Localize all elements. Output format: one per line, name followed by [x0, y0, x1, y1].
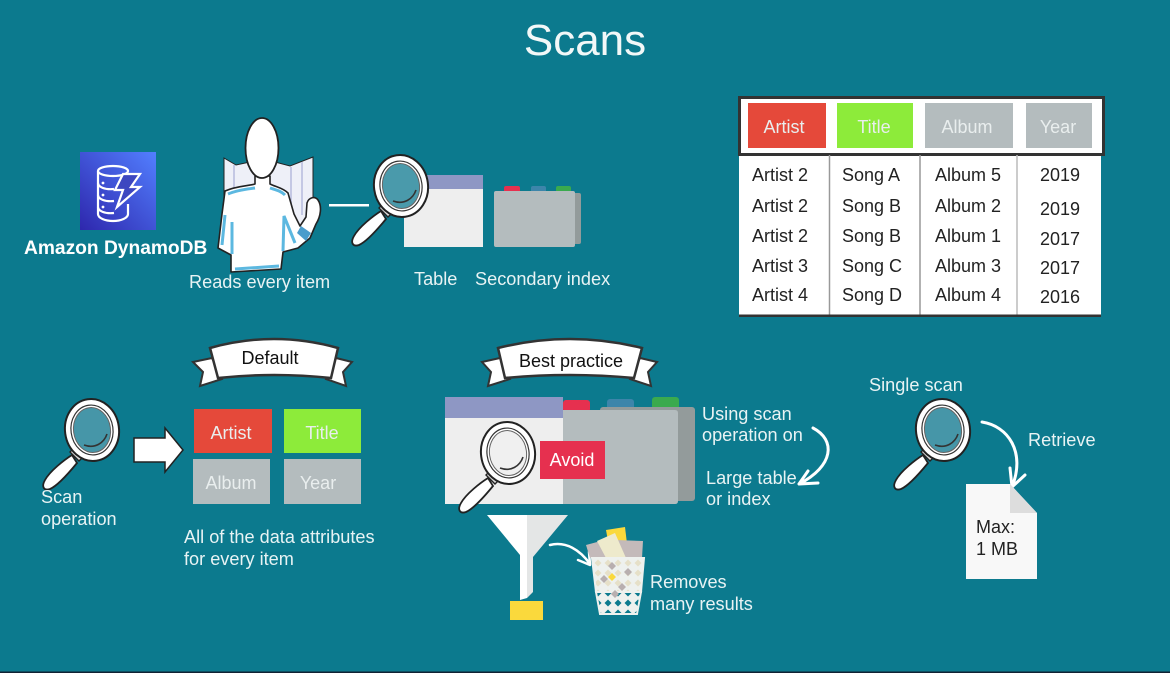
icon: scan magnifier	[43, 396, 123, 490]
ribbon: default	[193, 339, 352, 386]
attribute table: Year	[1040, 117, 1076, 137]
ribbon: best practice	[482, 339, 657, 386]
label: removes many results: Removes	[650, 572, 727, 592]
label: large table or index: or index	[706, 489, 771, 509]
icon: waste bin	[586, 527, 644, 614]
attribute table: Song B	[842, 196, 901, 216]
attribute table: Song B	[842, 226, 901, 246]
index folder with tabs	[563, 397, 695, 504]
attribute table: Title	[857, 117, 891, 137]
title: Scans	[524, 16, 646, 65]
attribute table: Artist 3	[752, 256, 808, 276]
attribute table: 2017	[1040, 229, 1080, 249]
attribute table: Album	[941, 117, 993, 137]
attribute grid: Artist	[210, 423, 252, 443]
attribute table: 2016	[1040, 287, 1080, 307]
label: retrieve: Retrieve	[1028, 430, 1096, 450]
label: large table or index: Large table	[706, 468, 797, 488]
callout: avoid	[540, 441, 605, 479]
icon: magnifier on table	[459, 419, 539, 513]
attribute table: Artist 4	[752, 285, 808, 305]
icon: single scan magnifier	[894, 396, 974, 490]
label: reads every item: Reads every item	[189, 272, 330, 292]
icon: small secondary index	[494, 186, 581, 247]
attribute table: Song C	[842, 256, 902, 276]
label: Amazon DynamoDB: Amazon DynamoDB	[24, 238, 207, 259]
label: table: Table	[414, 269, 457, 289]
attribute table: Artist 2	[752, 226, 808, 246]
ribbon: best practice: Best practice	[519, 351, 623, 371]
label: single scan: Single scan	[869, 375, 963, 395]
attribute table: Album 3	[935, 256, 1001, 276]
attribute grid: Album	[205, 473, 257, 493]
label: secondary index: Secondary index	[475, 269, 610, 289]
label: using scan operation: operation on	[702, 425, 803, 445]
arrow: funnel to bin	[550, 544, 590, 565]
icon: document max 1 MB: 1 MB	[976, 539, 1018, 559]
attribute table: Album 4	[935, 285, 1001, 305]
callout: avoid: Avoid	[550, 450, 594, 470]
arrow: retrieve	[982, 422, 1025, 487]
icon: funnel	[487, 515, 568, 620]
icon: small table	[404, 175, 483, 247]
icon: Amazon DynamoDB	[80, 152, 156, 230]
table panel	[445, 397, 563, 504]
attribute table: Artist 2	[752, 165, 808, 185]
arrow: curved to large table	[799, 428, 828, 484]
icon: person reading a map	[218, 118, 320, 272]
attribute table: Album 5	[935, 165, 1001, 185]
attribute table: 2019	[1040, 165, 1080, 185]
icon: document max 1 MB: Max:	[976, 517, 1015, 537]
attribute table: Song D	[842, 285, 902, 305]
icon: document max 1 MB	[966, 484, 1037, 579]
attribute table: Song A	[842, 165, 900, 185]
attribute table: Artist 2	[752, 196, 808, 216]
attribute table: 2019	[1040, 199, 1080, 219]
attribute table: Album 2	[935, 196, 1001, 216]
arrow: scan to attributes	[134, 428, 183, 472]
attribute grid	[193, 409, 361, 504]
label: removes many results: many results	[650, 594, 753, 614]
attribute table	[739, 98, 1104, 317]
attribute grid: Year	[300, 473, 336, 493]
label: all data attributes: for every item	[184, 549, 294, 569]
ribbon: default: Default	[241, 348, 299, 368]
label: scan operation: Scan	[41, 487, 82, 507]
label: all data attributes: All of the data attributes	[184, 527, 375, 547]
label: scan operation: operation	[41, 509, 117, 529]
icon: magnifier over table	[352, 152, 432, 246]
label: using scan operation: Using scan	[702, 404, 792, 424]
attribute table: Album 1	[935, 226, 1001, 246]
attribute grid: Title	[305, 423, 339, 443]
attribute table: Artist	[763, 117, 805, 137]
attribute table: 2017	[1040, 258, 1080, 278]
connector line	[329, 204, 369, 206]
